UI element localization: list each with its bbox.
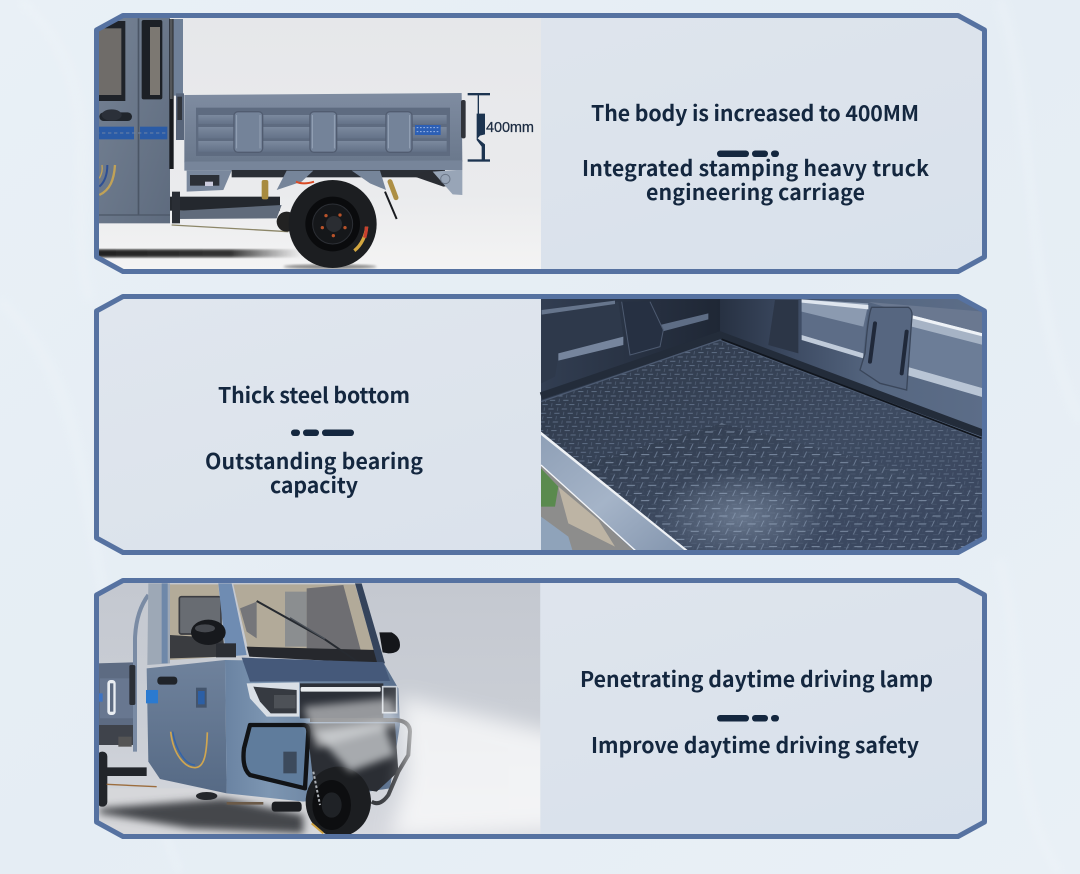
frame 2: [96, 296, 984, 552]
photo: cargo floor: [541, 297, 984, 563]
panel: body height: [96, 15, 986, 273]
panel: daytime lamp: [96, 580, 986, 838]
photo: cab with beam: [99, 583, 540, 834]
panel background: [541, 18, 982, 269]
heading: daytime lamp: Penetrating daytime driving lamp: [580, 663, 933, 694]
description: bearing capacity: [205, 445, 423, 500]
annotation: 400mm: [468, 93, 490, 162]
frame 1: [96, 16, 984, 272]
description: stamping carriage: engineering carriage: [646, 176, 865, 207]
frame 3: [96, 580, 984, 836]
photo: truck bed side view: [96, 15, 541, 272]
panel background: [99, 299, 541, 550]
description: driving safety: Improve daytime driving safety: [591, 729, 919, 760]
description: stamping carriage: Integrated stamping heavy truck: [582, 152, 929, 183]
description: bearing capacity: Outstanding bearing: [205, 445, 423, 476]
panel: steel bottom: [96, 296, 986, 563]
divider ornament: [717, 150, 779, 157]
description: bearing capacity: capacity: [270, 469, 358, 500]
heading: thick steel: Thick steel bottom: [218, 379, 410, 410]
description: stamping carriage: [582, 152, 929, 207]
panel background: [540, 583, 982, 834]
heading: body increased: The body is increased to 400MM: [591, 97, 919, 128]
label: 400mm: 400mm: [486, 120, 534, 136]
divider ornament: [291, 430, 354, 436]
divider ornament: [717, 715, 779, 722]
